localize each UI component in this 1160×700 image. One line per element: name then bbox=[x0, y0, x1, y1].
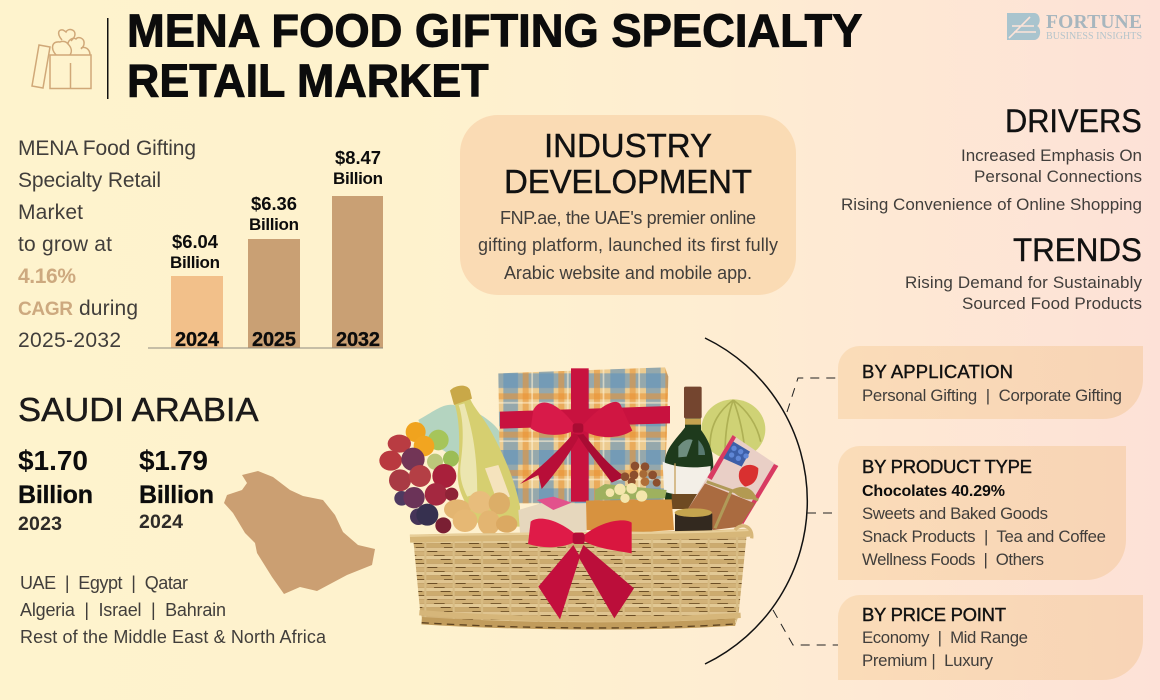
heading: Saudi Arabia: SAUDI ARABIA bbox=[18, 392, 259, 429]
text block: industry body: gifting platform, launched its first fully bbox=[478, 235, 778, 255]
heading: industry development: INDUSTRY bbox=[544, 127, 712, 164]
white cake bbox=[518, 497, 587, 533]
text block: industry body: FNP.ae, the UAE's premier online bbox=[500, 208, 756, 228]
jar bbox=[675, 508, 712, 533]
panel: by application: BY APPLICATION bbox=[862, 361, 1013, 382]
bar chart: market size: Billion bbox=[333, 169, 383, 188]
bar 2025 bbox=[248, 239, 300, 348]
panel: by product type: BY PRODUCT TYPE bbox=[862, 456, 1032, 477]
heading: industry development bbox=[504, 127, 752, 200]
panel: by product type: Snack Products | Tea and Coffee bbox=[862, 527, 1106, 546]
drivers: Personal Connections bbox=[974, 167, 1142, 186]
text block: market growth: MENA Food Gifting bbox=[18, 137, 196, 160]
melon bbox=[701, 399, 765, 459]
text block: other countries: UAE | Egypt | Qatar bbox=[20, 573, 188, 593]
connector: price point bbox=[773, 610, 838, 645]
connector: product type bbox=[807, 512, 838, 514]
text block: market growth: 4.16% bbox=[18, 265, 76, 288]
connector: application bbox=[787, 378, 838, 412]
bar chart: market size: Billion bbox=[249, 215, 299, 234]
bar chart: market size: $8.47 bbox=[335, 147, 381, 168]
bar chart: market size: $6.04 bbox=[172, 231, 219, 252]
text block: other countries bbox=[20, 573, 327, 647]
map: Saudi Arabia bbox=[224, 471, 375, 594]
logo: Fortune Business Insights: BUSINESS INSIGHTS bbox=[1046, 31, 1142, 42]
trends: TRENDS bbox=[1013, 232, 1142, 268]
decorated card bbox=[688, 435, 778, 531]
stat: Saudi Arabia 2023 bbox=[18, 445, 93, 535]
stat: Saudi Arabia 2024: $1.79 bbox=[139, 445, 208, 476]
panel: by product type: Sweets and Baked Goods bbox=[862, 504, 1048, 523]
stat: Saudi Arabia 2024: Billion bbox=[139, 481, 214, 509]
stat: Saudi Arabia 2023: Billion bbox=[18, 481, 93, 509]
text block: market growth: to grow at bbox=[18, 233, 112, 256]
bar chart: market size: 2024 bbox=[175, 329, 220, 351]
bar chart: market size: 2025 bbox=[252, 329, 296, 351]
panel: by application: Personal Gifting | Corporate Gifting bbox=[862, 386, 1122, 405]
panel: by price point: Economy | Mid Range bbox=[862, 628, 1028, 647]
bar chart: market size: Billion bbox=[170, 253, 220, 272]
panel: by price point: Premium | Luxury bbox=[862, 651, 994, 670]
panel: by price point bbox=[838, 595, 1143, 680]
text block: market growth bbox=[18, 137, 196, 352]
stat: Saudi Arabia 2023: 2023 bbox=[18, 513, 62, 535]
bar 2024 bbox=[171, 276, 223, 348]
drivers: DRIVERS bbox=[1005, 103, 1142, 139]
icon: gift box with hearts bbox=[32, 30, 91, 88]
illustration: gift basket bbox=[379, 367, 778, 628]
stat: Saudi Arabia 2023: $1.70 bbox=[18, 445, 88, 476]
yellow bottle bbox=[450, 386, 520, 527]
text block: other countries: Rest of the Middle East & North Africa bbox=[20, 627, 327, 647]
teal wrap bbox=[418, 405, 501, 457]
wine bottle bbox=[663, 387, 713, 509]
text block: industry body: Arabic website and mobile app. bbox=[504, 263, 752, 283]
trends bbox=[905, 232, 1142, 313]
drivers bbox=[841, 103, 1142, 214]
trends: Rising Demand for Sustainably bbox=[905, 273, 1142, 292]
grapes and fruit bbox=[379, 422, 459, 533]
arc around basket bbox=[705, 338, 807, 664]
text block: industry body bbox=[478, 208, 778, 283]
potatoes bbox=[444, 491, 517, 535]
title: MENA FOOD GIFTING SPECIALTY bbox=[127, 5, 862, 57]
nuts bbox=[621, 462, 661, 487]
panel: by product type bbox=[838, 446, 1126, 580]
panel: by product type: Wellness Foods | Others bbox=[862, 550, 1044, 569]
stat: Saudi Arabia 2024: 2024 bbox=[139, 511, 183, 533]
title divider bbox=[107, 18, 108, 99]
bar chart: market size: $6.36 bbox=[251, 193, 297, 214]
wicker basket bbox=[410, 526, 752, 628]
panel: by product type: Chocolates 40.29% bbox=[862, 483, 1005, 500]
bar chart: market size: 2032 bbox=[336, 329, 380, 351]
text block: market growth: CAGR bbox=[18, 299, 73, 320]
bar chart: market size bbox=[148, 147, 383, 351]
bar 2032 bbox=[332, 196, 383, 348]
logo: Fortune Business Insights bbox=[1007, 12, 1142, 42]
basket red bow bbox=[528, 519, 634, 619]
text block: market growth: Specialty Retail bbox=[18, 169, 161, 192]
heading: industry development: DEVELOPMENT bbox=[504, 163, 752, 200]
title: RETAIL MARKET bbox=[127, 55, 489, 107]
panel: by application bbox=[838, 346, 1143, 419]
plaid gift box bbox=[498, 367, 670, 503]
logo: Fortune Business Insights: FORTUNE bbox=[1046, 12, 1142, 33]
drivers: Rising Convenience of Online Shopping bbox=[841, 195, 1142, 214]
text block: market growth: 2025-2032 bbox=[18, 329, 121, 352]
panel: industry development bbox=[460, 115, 796, 295]
trends: Sourced Food Products bbox=[962, 294, 1142, 313]
orange cake with cheese bbox=[586, 483, 674, 532]
text block: market growth: Market bbox=[18, 201, 83, 224]
drivers: Increased Emphasis On bbox=[961, 146, 1142, 165]
title bbox=[127, 5, 862, 107]
text block: other countries: Algeria | Israel | Bahrain bbox=[20, 600, 226, 620]
stat: Saudi Arabia 2024 bbox=[139, 445, 214, 533]
text block: market growth: during bbox=[79, 297, 138, 320]
panel: by price point: BY PRICE POINT bbox=[862, 604, 1006, 625]
